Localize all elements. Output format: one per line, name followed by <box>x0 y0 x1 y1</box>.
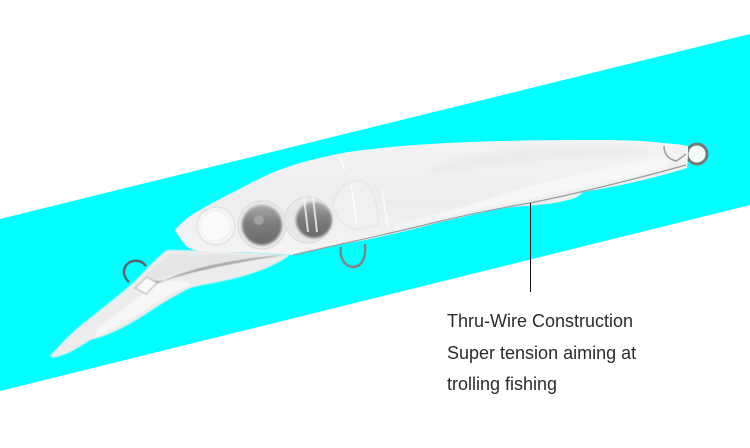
eye socket <box>197 207 235 245</box>
diving lip hook ring <box>124 261 146 282</box>
belly wire line <box>293 165 686 255</box>
caption text: Thru-Wire Construction <box>447 311 633 331</box>
first ball chamber <box>238 201 286 249</box>
body upper shade <box>420 147 655 175</box>
pointer line <box>530 203 532 292</box>
caption text <box>447 311 636 394</box>
lure <box>50 140 707 358</box>
body lower sheen <box>395 156 672 230</box>
lure body <box>175 140 688 255</box>
rib highlights <box>340 157 388 228</box>
third chamber <box>333 180 378 230</box>
second ball chamber <box>285 197 332 243</box>
diving lip <box>50 250 290 358</box>
tail eye ring <box>687 144 707 164</box>
belly hook ring <box>341 244 365 267</box>
caption text: Super tension aiming at <box>447 342 636 362</box>
tail keel detail <box>664 146 686 161</box>
cyan diagonal band <box>0 34 750 391</box>
caption text: trolling fishing <box>447 374 557 394</box>
